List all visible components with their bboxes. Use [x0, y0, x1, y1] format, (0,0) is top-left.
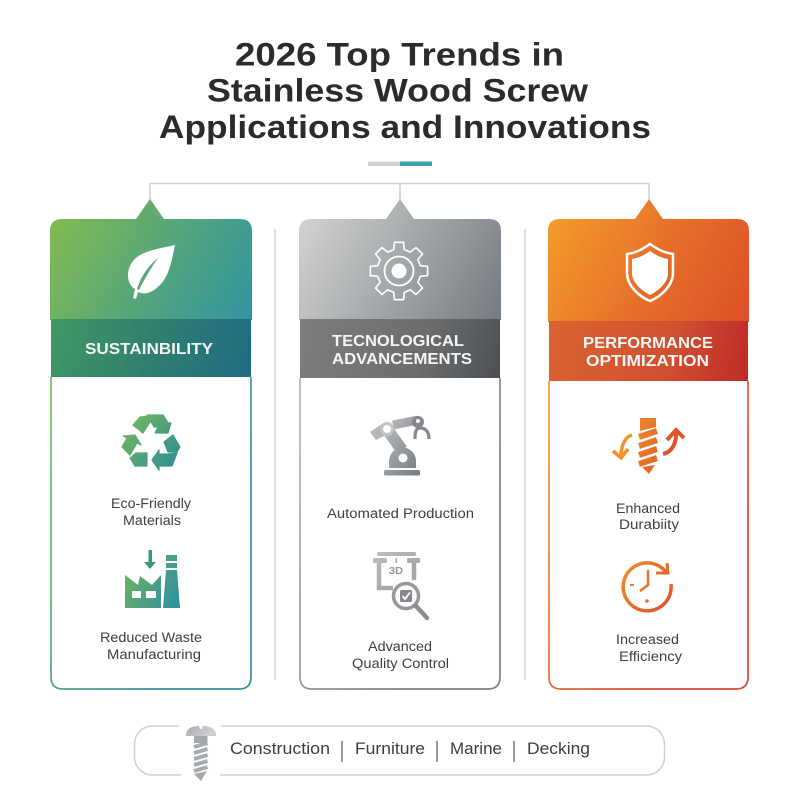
technological header: [299, 199, 501, 320]
label: advanced quality control: Advanced: [368, 639, 432, 654]
label: reduced waste manufacturing: Manufacturing: [107, 647, 201, 662]
icon: shield: [627, 244, 673, 301]
panel: technological advancements: [299, 199, 501, 689]
label: enhanced durability: [616, 501, 680, 532]
title: Stainless Wood Screw: [207, 72, 588, 108]
sustainability header: [50, 199, 252, 320]
label: reduced waste manufacturing: [100, 630, 202, 662]
panel: performance optimization: [548, 199, 749, 689]
label: enhanced durability: Enhanced: [616, 501, 680, 516]
connector lines: [150, 184, 649, 200]
label: increased efficiency: Increased: [616, 632, 679, 647]
label: eco-friendly materials: Materials: [123, 513, 181, 528]
icon: recycle: [122, 415, 180, 470]
band label: TECNOLOGICAL: [332, 333, 464, 350]
label: decking: Decking: [527, 739, 590, 758]
icon: 3D quality inspection: 3D: [389, 565, 403, 577]
band label: ADVANCEMENTS: [332, 351, 472, 368]
icon: factory: [125, 550, 180, 608]
column dividers: [275, 229, 525, 680]
band label: [332, 333, 472, 368]
icon: leaf: [128, 245, 175, 299]
label: eco-friendly materials: [111, 496, 191, 528]
title: 2026 Top Trends in: [235, 36, 564, 72]
panel: sustainability: [50, 199, 252, 689]
label: reduced waste manufacturing: Reduced Waste: [100, 630, 202, 645]
icon: clock with arrow: [623, 563, 671, 611]
label: marine: Marine: [450, 739, 502, 758]
bar outline: [134, 726, 664, 775]
panel body outline: [51, 377, 251, 689]
title: [159, 36, 651, 145]
band label: OPTIMIZATION: [586, 353, 709, 370]
label: advanced quality control: Quality Control: [352, 656, 449, 671]
icon: robot arm: [370, 416, 429, 476]
icon: screw with rotation arrows: [613, 418, 684, 474]
performance header: [548, 199, 749, 322]
band label: PERFORMANCE: [583, 335, 713, 352]
icon: 3D quality inspection: [373, 552, 427, 618]
separators: [342, 741, 514, 762]
performance band: [549, 321, 748, 381]
label: automated production: Automated Production: [327, 506, 474, 521]
label: increased efficiency: Efficiency: [619, 649, 682, 664]
technological band: [300, 319, 500, 378]
icon: gear: [370, 242, 428, 300]
label: enhanced durability: Durabiity: [619, 517, 679, 532]
label: construction: Construction: [230, 739, 330, 758]
panel body outline: [300, 378, 500, 689]
label: eco-friendly materials: Eco-Friendly: [111, 496, 191, 511]
label: increased efficiency: [616, 632, 682, 664]
label: furniture: Furniture: [355, 739, 425, 758]
title accent bar: [368, 162, 432, 166]
band label: [583, 335, 713, 370]
title: Applications and Innovations: [159, 109, 651, 145]
sustainability band: [51, 319, 251, 377]
panel body outline: [549, 381, 748, 689]
applications bar: [134, 726, 664, 781]
icon: screw: [186, 726, 216, 781]
band label: SUSTAINBILITY: [85, 341, 213, 358]
label: advanced quality control: [352, 639, 449, 671]
